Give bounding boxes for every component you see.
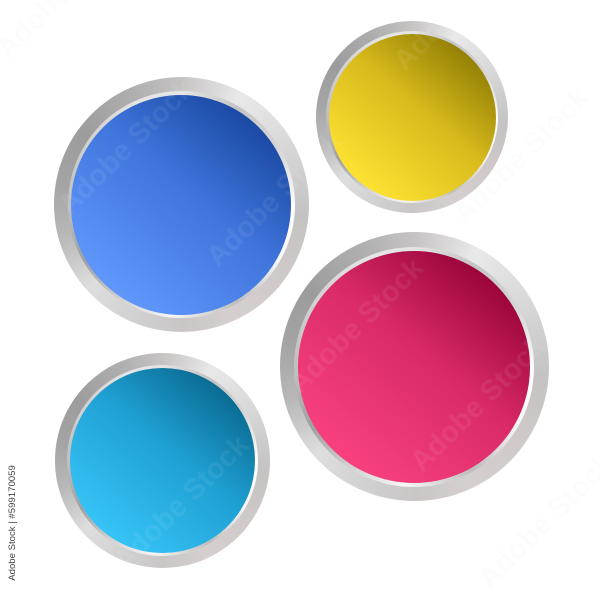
watermark text: Adobe Stock	[282, 251, 431, 400]
yellow fill	[328, 34, 496, 200]
circle: yellow button	[316, 21, 508, 213]
watermark text: Adobe Stock	[404, 329, 553, 478]
pink inner bevel	[294, 246, 534, 486]
yellow inner bevel	[326, 31, 498, 203]
blue fill	[71, 94, 291, 314]
blue inner bevel	[68, 91, 294, 318]
pink fill	[298, 250, 530, 482]
watermark text: Adobe Stock	[52, 72, 201, 221]
watermark text: Adobe Stock	[200, 124, 349, 273]
cyan inner bevel	[66, 365, 258, 556]
cyan fill	[70, 368, 254, 553]
watermark text: Adobe Stock	[107, 428, 256, 577]
circle: cyan button	[54, 353, 270, 568]
stock id label: Adobe Stock | #599170059	[7, 465, 18, 581]
circle: blue button	[54, 77, 308, 332]
watermark text: Adobe Stock	[447, 81, 596, 230]
circle: pink button	[280, 232, 548, 501]
